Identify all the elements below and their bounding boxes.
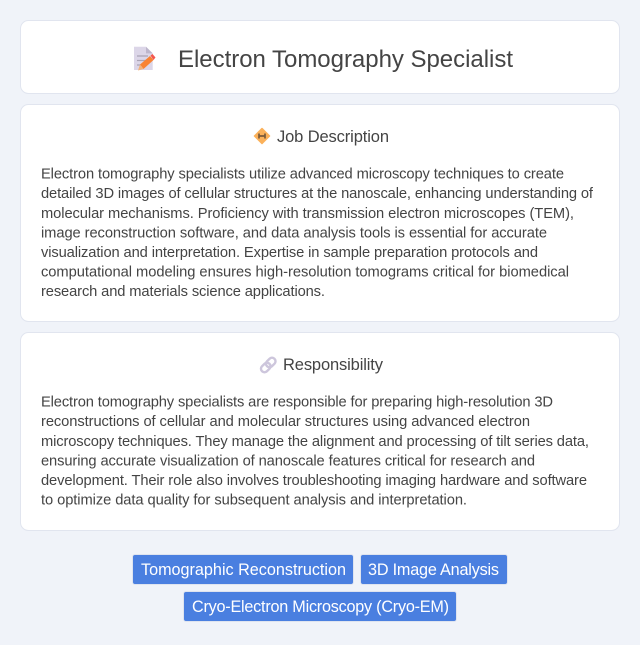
tag: cryo-electron microscopy: Cryo-Electron Microscopy (Cryo-EM) — [192, 598, 449, 616]
icon: chain link — [260, 356, 277, 374]
tag: 3d image analysis — [360, 554, 508, 584]
text block: job description: visualization and interpretation. Expertise in sample preparation protocols and — [41, 245, 538, 261]
text block: responsibility: ensuring accurate visualization of nanoscale features critical for research and — [41, 453, 535, 469]
text block: job description: Electron tomography specialists utilize advanced microscopy techniques to create — [41, 167, 564, 183]
text block: job description: image reconstruction software, and data analysis tools is essential for accurate — [41, 225, 547, 241]
text block: job description: research and materials science applications. — [41, 284, 325, 300]
panel: responsibility — [20, 332, 620, 530]
text block: job description: detailed 3D images of cellular structures at the nanoscale, enhancing understanding of — [41, 186, 594, 202]
panel: job description — [20, 104, 620, 322]
tag: 3d image analysis: 3D Image Analysis — [368, 561, 499, 579]
icon: document with pencil — [134, 47, 156, 70]
text block: responsibility: to optimize data quality for subsequent analysis and interpretation. — [41, 493, 467, 509]
text block: job description: molecular mechanisms. Proficiency with transmission electron microscopes (TEM), — [41, 206, 574, 222]
title: Electron Tomography Specialist — [178, 46, 513, 73]
icon: orange diamond — [254, 128, 270, 144]
heading: responsibility: Responsibility — [283, 356, 384, 374]
tag: tomographic reconstruction: Tomographic Reconstruction — [141, 561, 346, 579]
tag: tomographic reconstruction — [132, 554, 354, 584]
text block: job description — [41, 167, 594, 300]
text block: responsibility: Electron tomography specialists are responsible for preparing high-resolution 3D — [41, 395, 553, 411]
text block: responsibility: reconstructions of cellular and molecular structures using advanced electron — [41, 414, 530, 430]
text block: responsibility — [41, 395, 589, 509]
panel: title header — [20, 20, 620, 94]
text block: responsibility: microscopy techniques. They manage the alignment and processing of tilt series data, — [41, 434, 589, 450]
text block: responsibility: development. Their role also involves troubleshooting imaging hardware and software — [41, 473, 587, 489]
text block: job description: computational modeling ensures high-resolution tomograms critical for biomedical — [41, 265, 569, 281]
heading: job description: Job Description — [277, 128, 389, 146]
tag: cryo-electron microscopy — [184, 592, 456, 622]
